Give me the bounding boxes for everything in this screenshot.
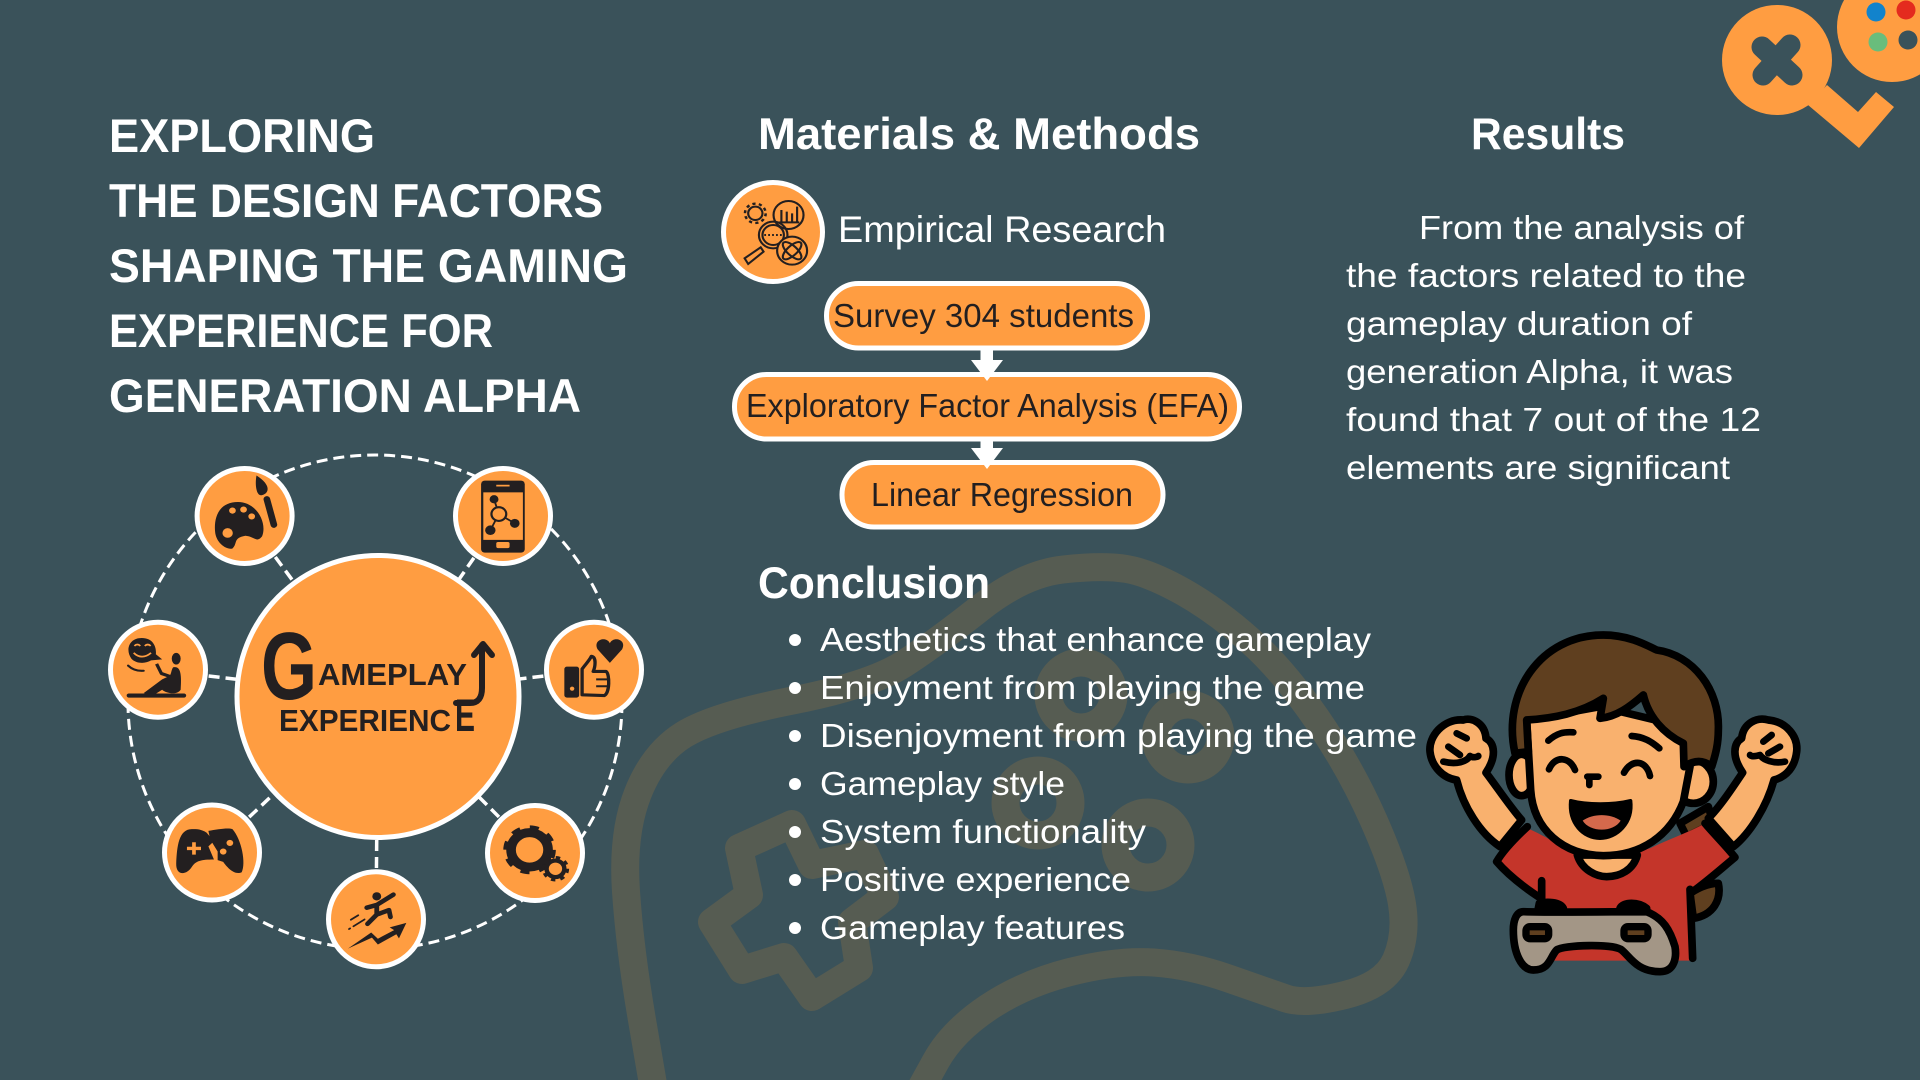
flowchart: methods [734, 284, 1240, 527]
heading: materials and methods: Materials & Methods [758, 110, 1200, 159]
pill: linear regression [842, 462, 1163, 527]
central circle: gameplay experience: EXPERIENC [279, 703, 451, 738]
results paragraph: found that 7 out of the 12 [1346, 401, 1761, 438]
pill: survey: Survey 304 students [833, 297, 1134, 334]
icon: running figure over rising arrow (gameplay style / features) [328, 872, 424, 967]
title: GENERATION ALPHA [109, 369, 581, 422]
central circle: gameplay experience [237, 556, 519, 838]
results paragraph: elements are significant [1346, 449, 1730, 486]
results paragraph: the factors related to the [1346, 257, 1746, 294]
arrow: survey to EFA [971, 350, 1003, 381]
text: empirical research: Empirical Research [838, 209, 1166, 250]
illustration: cheering boy with controller [1430, 635, 1797, 972]
title: EXPLORING [109, 109, 375, 162]
icon: gears (system functionality) [488, 806, 582, 900]
title [109, 109, 628, 422]
conclusion bullet list: Disenjoyment from playing the game [820, 717, 1417, 754]
central circle: gameplay experience: G [261, 613, 317, 720]
results paragraph: From the analysis of [1419, 209, 1745, 246]
icon: thumbs up with heart (enjoyment) [546, 622, 642, 717]
pill: exploratory factor analysis [734, 374, 1240, 439]
icon: smartphone with network [456, 468, 550, 564]
central circle: gameplay experience: AMEPLAY [318, 657, 467, 692]
heading: results: Results [1471, 110, 1625, 159]
results paragraph [1346, 209, 1761, 486]
conclusion bullet list [789, 621, 1417, 946]
arrow: EFA to regression [971, 441, 1003, 469]
conclusion bullet list: Enjoyment from playing the game [820, 669, 1365, 706]
central circle: gameplay experience: E [455, 690, 475, 741]
title: SHAPING THE GAMING [109, 239, 628, 292]
conclusion bullet list: Gameplay features [820, 909, 1125, 946]
conclusion bullet list: Positive experience [820, 861, 1131, 898]
title: EXPERIENCE FOR [109, 304, 493, 357]
conclusion bullet list: Aesthetics that enhance gameplay [820, 621, 1372, 658]
title: THE DESIGN FACTORS [109, 174, 603, 227]
icon: empirical research [724, 182, 822, 282]
pill: linear regression: Linear Regression [871, 476, 1133, 513]
pill: exploratory factor analysis: Exploratory Factor Analysis (EFA) [746, 387, 1229, 424]
results paragraph: generation Alpha, it was [1346, 353, 1733, 390]
background controller watermark [625, 567, 1404, 1080]
conclusion bullet list: System functionality [820, 813, 1147, 850]
icon: person with smiling speech bubble (experience) [110, 622, 206, 717]
results paragraph: gameplay duration of [1346, 305, 1693, 342]
pill: survey [826, 284, 1148, 348]
heading: conclusion: Conclusion [758, 559, 990, 608]
decorative game controller top right [1722, 0, 1920, 148]
conclusion bullet list: Gameplay style [820, 765, 1065, 802]
icon: broken game controller (disenjoyment) [164, 805, 260, 900]
icon: palette and brush (aesthetics) [197, 468, 292, 564]
diagram: gameplay experience hub with seven factors [110, 455, 642, 967]
